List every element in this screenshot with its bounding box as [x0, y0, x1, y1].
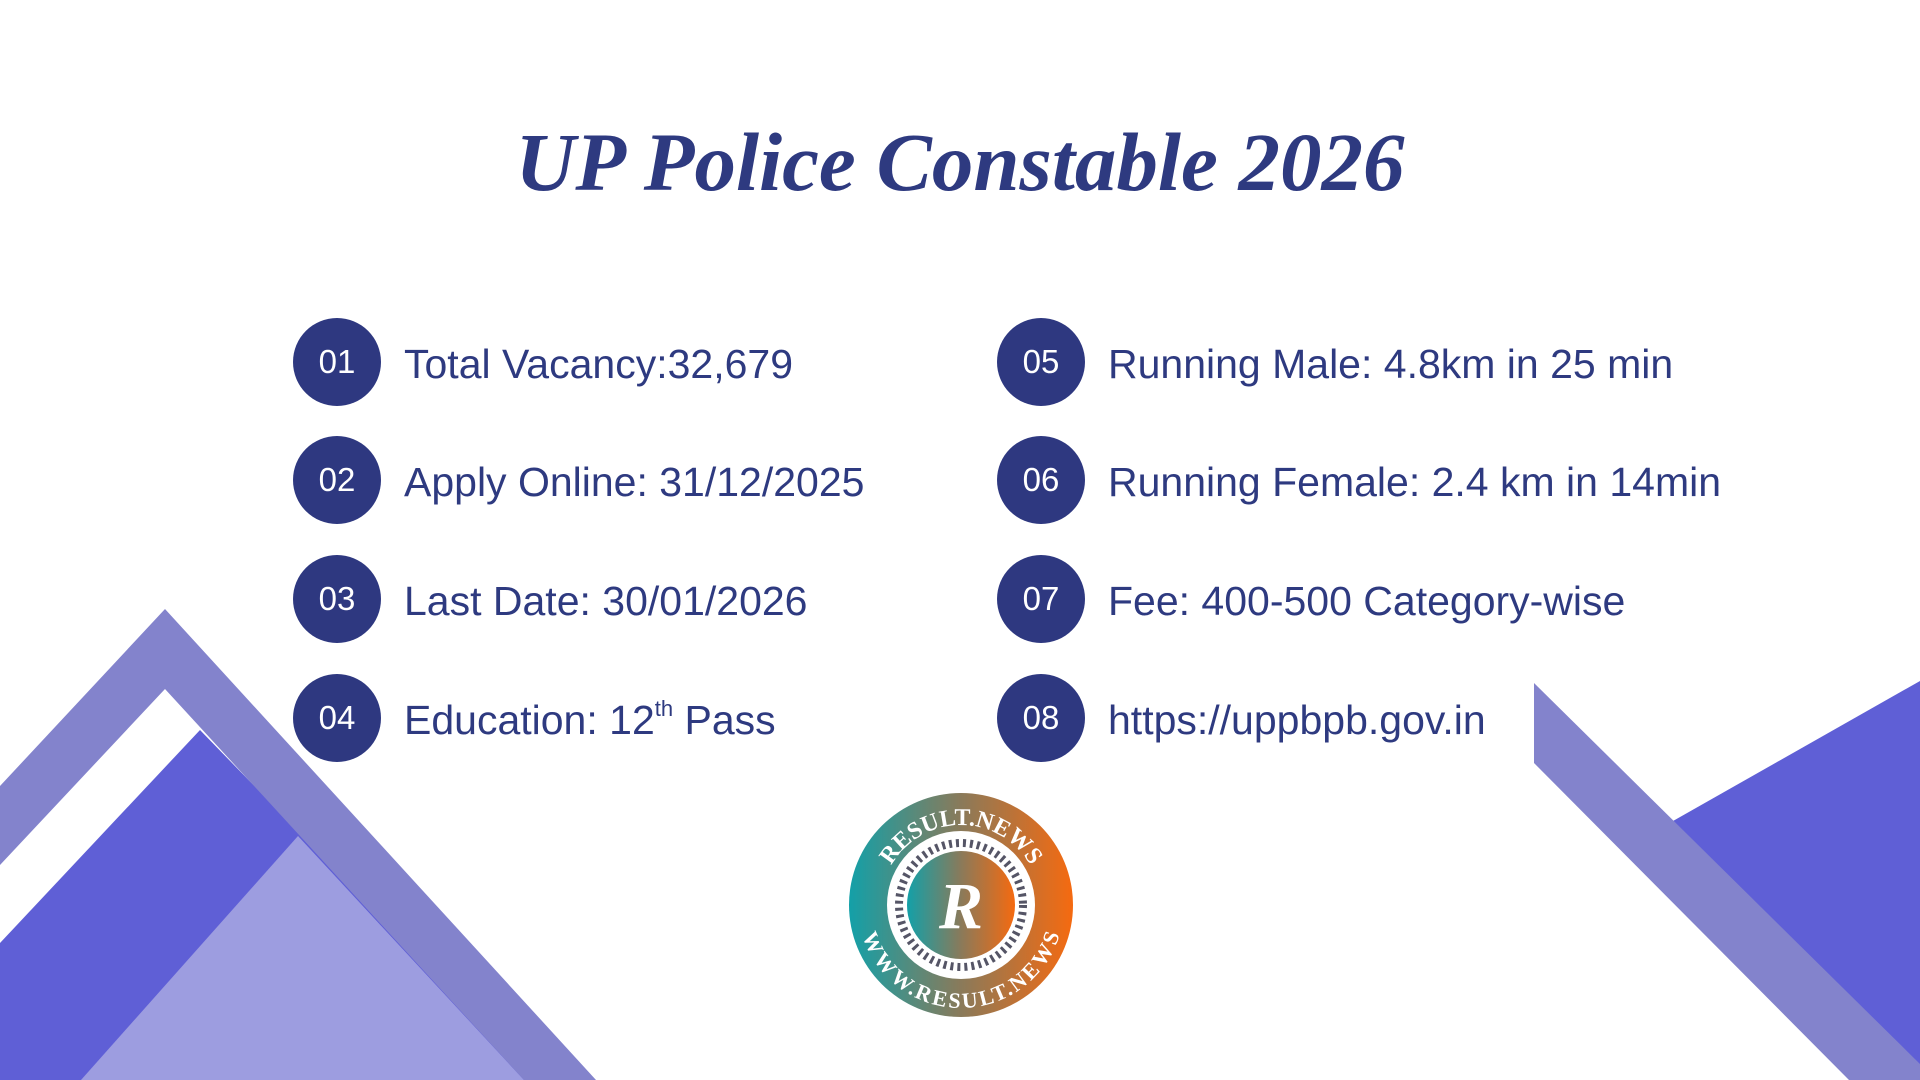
item 08: https://uppbpb.gov.in [1108, 697, 1486, 743]
item 04: 04 [319, 699, 355, 736]
item 06: 06 [1023, 461, 1059, 498]
item 03: Last Date: 30/01/2026 [404, 578, 807, 624]
item 04: Education: 12th Pass [404, 696, 776, 743]
item 02 [293, 436, 864, 524]
title: UP Police Constable 2026 [515, 116, 1405, 208]
logo: result.news badge [849, 793, 1073, 1017]
item 03 [293, 555, 807, 643]
item 05: 05 [1023, 343, 1059, 380]
item 01: 01 [319, 343, 355, 380]
item 04 [293, 674, 776, 762]
item 06 [997, 436, 1721, 524]
item 07: 07 [1023, 580, 1059, 617]
logo: result.news badge: RESULT.NEWS [878, 809, 1042, 865]
logo: result.news badge: WWW.RESULT.NEWS [864, 930, 1058, 1008]
item 08 [997, 674, 1486, 762]
item 01: Total Vacancy:32,679 [404, 341, 793, 387]
item 07: Fee: 400-500 Category-wise [1108, 578, 1625, 624]
item 03: 03 [319, 580, 355, 617]
logo: result.news badge: R [938, 870, 983, 943]
item 07 [997, 555, 1625, 643]
item 08: 08 [1023, 699, 1059, 736]
item 06: Running Female: 2.4 km in 14min [1108, 459, 1721, 505]
item 05: Running Male: 4.8km in 25 min [1108, 341, 1673, 387]
item 01 [293, 318, 793, 406]
item 05 [997, 318, 1673, 406]
item 02: Apply Online: 31/12/2025 [404, 459, 864, 505]
item 02: 02 [319, 461, 355, 498]
